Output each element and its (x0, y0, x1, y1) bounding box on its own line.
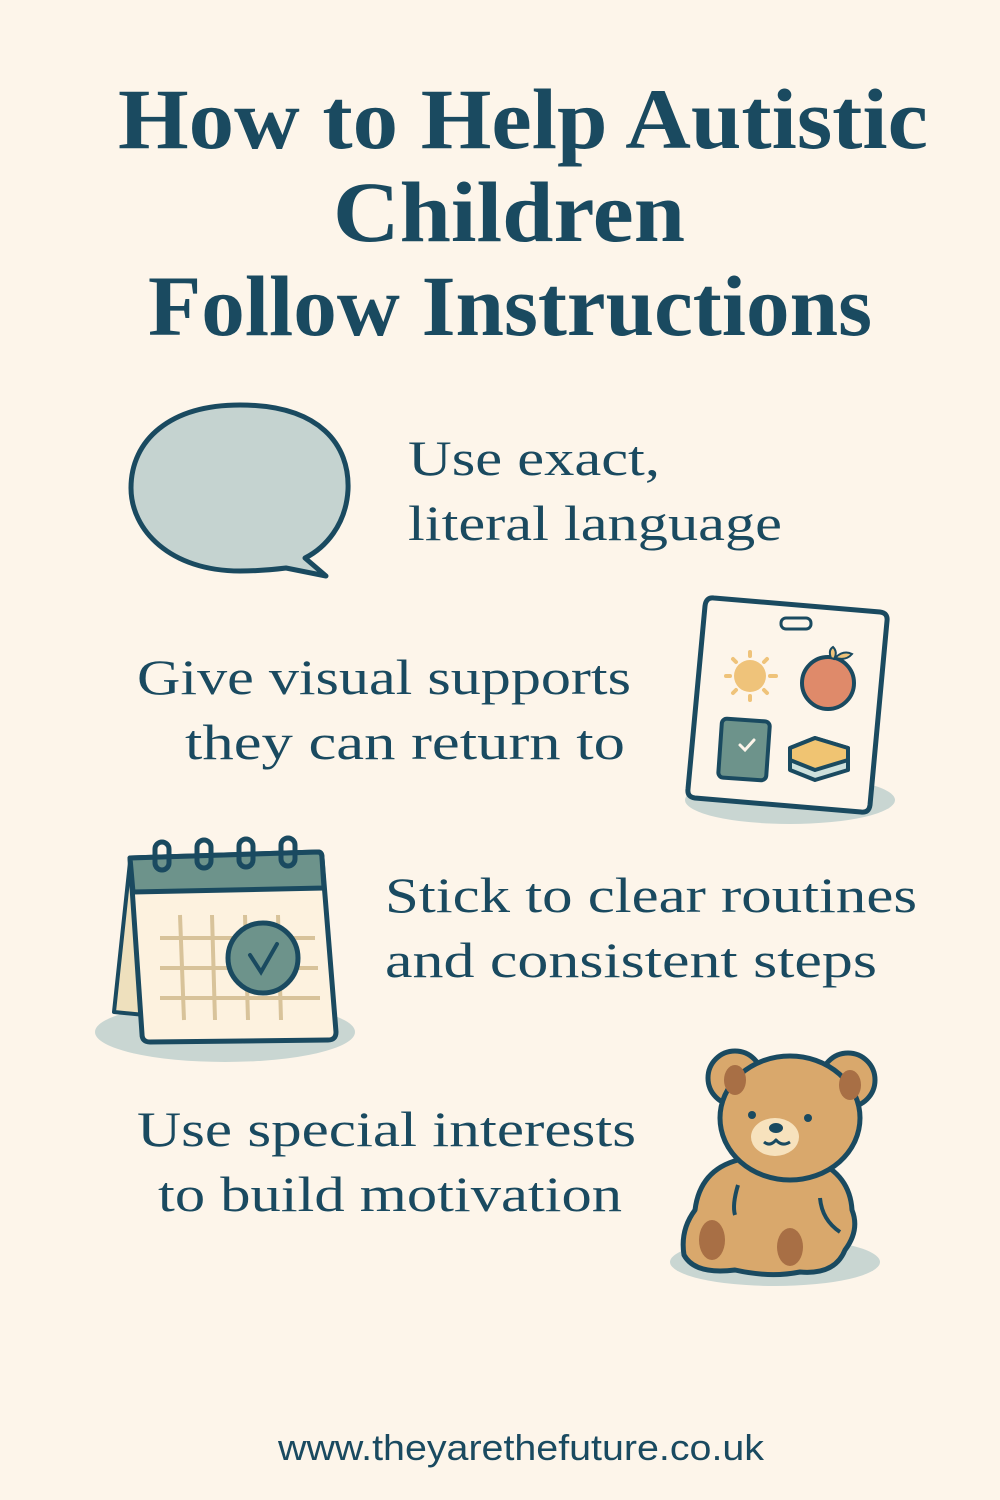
title (118, 71, 928, 354)
text: routines: Stick to clear routines (385, 867, 917, 923)
text: visual supports: Give visual supports (137, 649, 631, 705)
title: Follow Instructions (148, 258, 872, 354)
text: literal language (408, 430, 782, 551)
text: routines: and consistent steps (385, 932, 877, 988)
title: Children (333, 164, 685, 260)
icon: speech bubble (131, 405, 348, 576)
icon: calendar (95, 838, 355, 1062)
title: How to Help Autistic (118, 71, 928, 167)
text: special interests (137, 1101, 636, 1222)
icon: visual board (685, 598, 895, 824)
text: literal language: literal language (408, 495, 782, 551)
text: special interests: Use special interests (137, 1101, 636, 1157)
footer url: www.theyarethefuture.co.uk (277, 1427, 765, 1468)
text: routines (385, 867, 917, 988)
text: special interests: to build motivation (158, 1166, 622, 1222)
text: visual supports (137, 649, 631, 770)
text: visual supports: they can return to (185, 714, 625, 770)
icon: teddy bear (670, 1051, 880, 1286)
text: literal language: Use exact, (408, 430, 660, 486)
